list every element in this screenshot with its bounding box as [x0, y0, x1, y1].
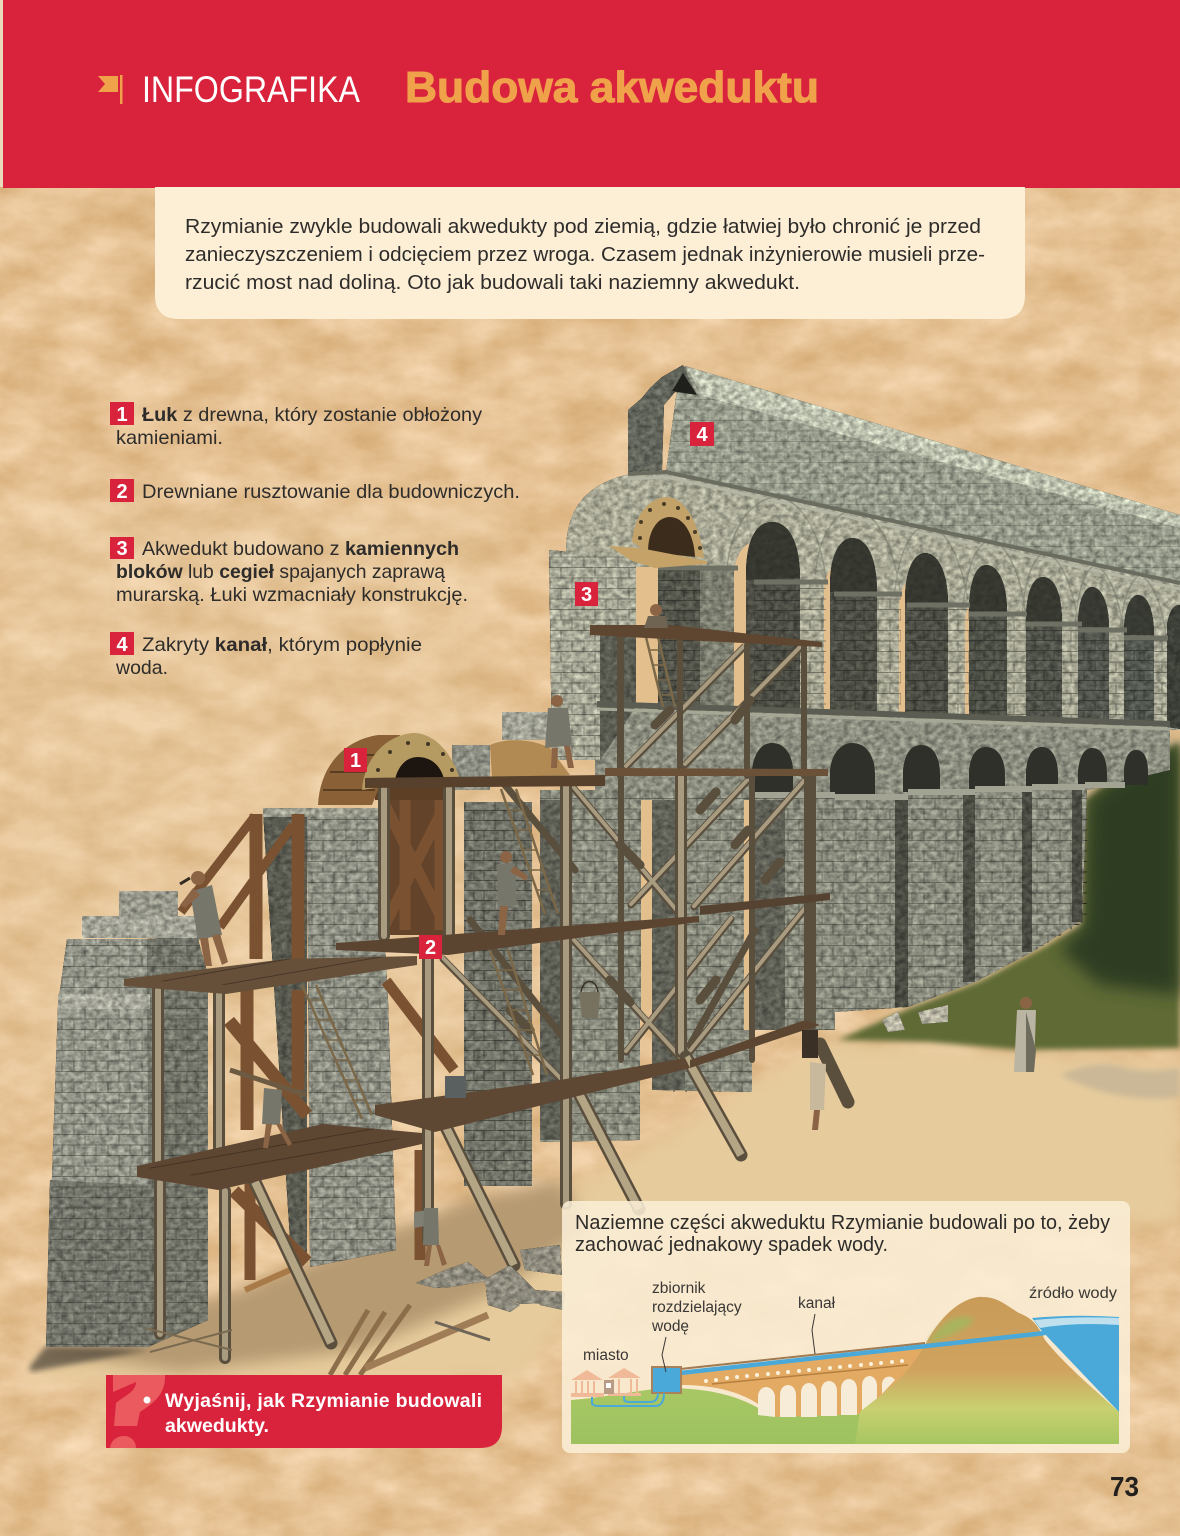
- worker on the arch: [545, 695, 574, 768]
- bridge: [680, 1346, 925, 1417]
- lower arches: [752, 743, 1148, 797]
- diagram labels: źródło wody: [1029, 1285, 1117, 1302]
- sand seen through arches: [636, 543, 970, 720]
- sand gaps between lower piers: [641, 800, 754, 1030]
- second pier: [263, 808, 396, 1267]
- icon: question mark: [110, 1375, 165, 1448]
- inset panel: water slope diagram: Naziemne części akweduktu Rzymianie budowali po to, żeby: [575, 1212, 1110, 1234]
- wooden platforms: [124, 625, 830, 1190]
- upper arch recesses: [746, 522, 1180, 729]
- upper wall: [549, 365, 1180, 760]
- legend 4: Zakryty kanał, którym popłynie: [142, 634, 422, 656]
- rope at the pier foot: [145, 1328, 232, 1352]
- block and top stones: [452, 712, 548, 790]
- diagram labels: wodę: [651, 1318, 689, 1335]
- intro panel: [155, 187, 1025, 319]
- legend 3: Akwedukt budowano z kamiennych: [142, 538, 459, 560]
- small arches: [704, 1359, 904, 1383]
- question box: Wyjaśnij, jak Rzymianie budowali: [165, 1390, 482, 1412]
- diagram labels: zbiornik: [652, 1280, 706, 1297]
- inset panel: water slope diagram: zachować jednakowy spadek wody.: [575, 1234, 888, 1256]
- question box: [106, 1375, 502, 1448]
- marker 3: [575, 582, 598, 606]
- marker 2: 2: [425, 937, 436, 959]
- legend 4: [110, 632, 422, 679]
- legend 3: 3: [116, 538, 128, 560]
- diagram labels: rozdzielający: [652, 1299, 742, 1316]
- intro panel: rzucić most nad doliną. Oto jak budowali taki naziemny akwedukt.: [185, 272, 800, 294]
- intro panel: Rzymianie zwykle budowali akwedukty pod ziemią, gdzie łatwiej było chronić je przed: [185, 216, 981, 238]
- title: Budowa akweduktu: [405, 63, 819, 112]
- marker 4: [690, 422, 714, 446]
- water source: [1032, 1316, 1119, 1412]
- worker on the ladder: [497, 851, 528, 935]
- ground and sandy foreground: [30, 1040, 1180, 1380]
- leader lines: [662, 1314, 815, 1372]
- bridge arches: [758, 1376, 895, 1417]
- grassy hillside: [838, 600, 1180, 1099]
- lower tier stone structure: [540, 706, 1170, 1142]
- marker 1: [344, 748, 367, 772]
- lower imposts: [752, 785, 1125, 797]
- inset panel: water slope diagram: [562, 1201, 1130, 1453]
- workers: [180, 604, 1036, 1266]
- legend 1: Łuk z drewna, który zostanie obłożony: [142, 404, 482, 426]
- page number: 73: [1110, 1471, 1139, 1502]
- standing Roman: [1014, 997, 1036, 1072]
- voussoir rings: [726, 497, 1166, 635]
- stones and timber on the ground: [330, 1005, 948, 1375]
- worker holding prop: [802, 1030, 826, 1130]
- worker with hammer: [180, 871, 228, 966]
- ladders: [302, 637, 675, 1119]
- worker carrying stone: [414, 1208, 447, 1266]
- worker top platform: [644, 604, 668, 628]
- mid cornice: [597, 704, 1170, 724]
- legend 4: 4: [116, 634, 128, 656]
- legend 1: [110, 402, 482, 449]
- marker 3: 3: [581, 584, 592, 606]
- pipes: [592, 1393, 664, 1406]
- marker 4: 4: [696, 424, 708, 446]
- legend 3: [110, 537, 468, 606]
- wooden centring: label 1 arch: [318, 733, 570, 805]
- third pier: [464, 802, 532, 1186]
- aqueduct: upper tier: [549, 365, 1180, 760]
- channel: [680, 1343, 925, 1369]
- legend 1: kamieniami.: [116, 427, 223, 449]
- legend 2: Drewniane rusztowanie dla budowniczych.: [142, 481, 520, 503]
- marker 2: [419, 935, 442, 959]
- stone piers under construction: [46, 712, 548, 1347]
- label: INFOGRAFIKA: INFOGRAFIKA: [142, 69, 360, 110]
- aqueduct: lower tier: [540, 706, 1170, 1142]
- question box: akwedukty.: [165, 1415, 269, 1437]
- marker 1: 1: [350, 750, 361, 772]
- bucket: [579, 982, 600, 1018]
- diagram labels: kanał: [798, 1295, 836, 1312]
- distribution tank: [652, 1367, 681, 1393]
- scaffolding poles and braces: [145, 632, 848, 1358]
- channel cornice: [628, 472, 1180, 583]
- imposts: [658, 568, 1168, 638]
- hill: [855, 1297, 1119, 1444]
- city temples: [571, 1368, 641, 1397]
- legend 1: 1: [116, 404, 128, 426]
- diagram ground: [571, 1388, 1119, 1444]
- legend 2: 2: [116, 481, 128, 503]
- pole lashings: [510, 700, 780, 1030]
- legend 4: woda.: [115, 657, 168, 679]
- intro panel: zanieczyszczeniem i odcięciem przez wroga. Czasem jednak inżynierowie musieli prze-: [185, 244, 985, 266]
- icon: flag: [98, 75, 122, 104]
- timber frames: [181, 785, 455, 1290]
- diagram labels: miasto: [583, 1347, 629, 1364]
- wooden arch centring at the top: [609, 497, 707, 568]
- header band: [0, 0, 1180, 188]
- diagram labels: [583, 1280, 1117, 1364]
- front pier: [46, 891, 208, 1347]
- arch tops in shadow: [746, 522, 1154, 635]
- worker carrying a beam: [230, 1070, 306, 1148]
- barrel: [445, 1076, 466, 1098]
- legend 3: murarską. Łuki wzmacniały konstrukcję.: [116, 584, 468, 606]
- legend 3: bloków lub cegieł spajanych zaprawą: [116, 561, 445, 583]
- pier masonry: [754, 582, 1154, 725]
- props: [255, 1044, 848, 1343]
